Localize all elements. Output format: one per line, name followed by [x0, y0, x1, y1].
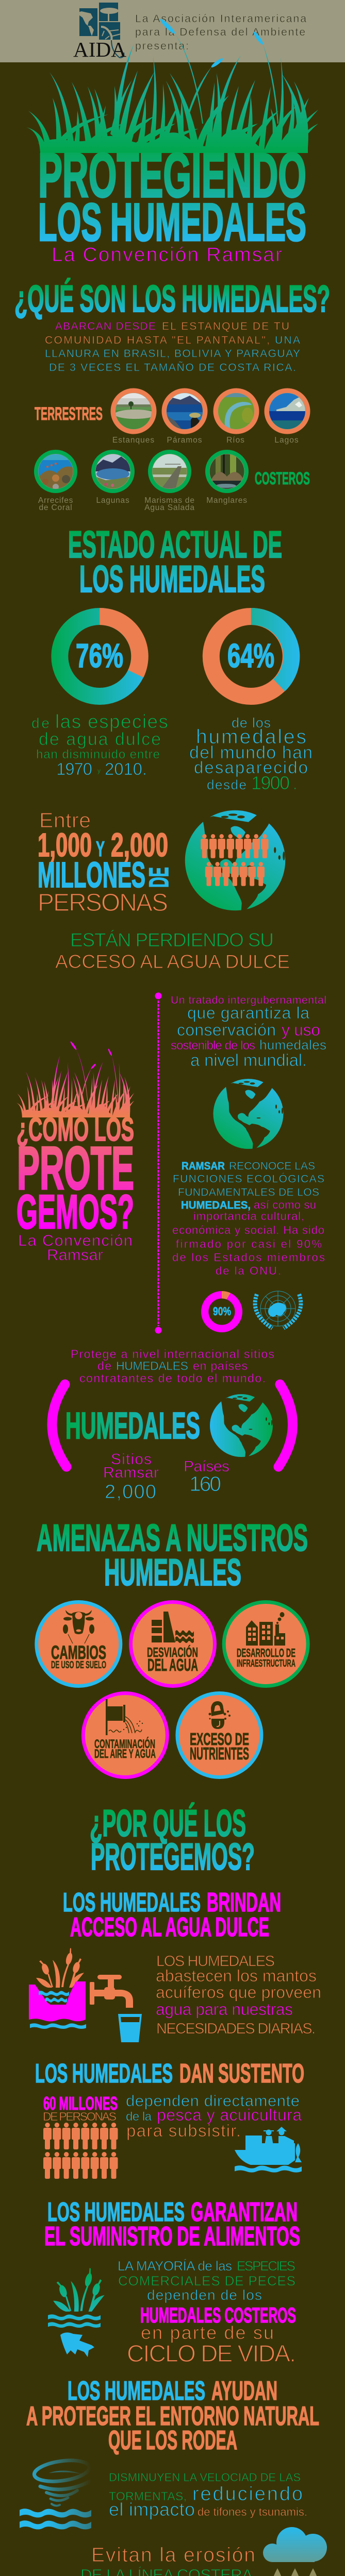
photo: arrecifes [34, 450, 77, 493]
ramsar text: FUNCIONES ECOLÓGICAS [173, 1173, 324, 1185]
presenter text: presenta: [135, 40, 189, 52]
heading: ayudan a proteger [26, 2376, 319, 2455]
text: humedales desaparecidos: humedales [196, 726, 306, 748]
text: tormentas [109, 2471, 307, 2520]
heading: brindan acceso: BRINDAN [207, 1888, 281, 1918]
text: tormentas: TORMENTAS, [109, 2489, 187, 2503]
icon: rows of people [43, 2123, 118, 2179]
heading: estado actual [68, 524, 282, 600]
text: humedales desaparecidos: del mundo han [189, 743, 313, 762]
statistic: 60 millones [43, 2093, 118, 2179]
ramsar text: importancia cultural, [193, 1210, 304, 1223]
text: protege sitios: en países [193, 1359, 248, 1372]
donut chart: 90% [205, 1291, 239, 1329]
captions: terrestres: Lagos [274, 436, 299, 445]
stat: sitios ramsar [103, 1451, 159, 1503]
text: especies de agua dulce: de agua dulce [39, 730, 161, 749]
text: especies de agua dulce [31, 711, 168, 778]
text: mantos acuíferos: abastecen los mantos [156, 1967, 317, 1985]
text: especies de agua dulce: de [31, 715, 50, 731]
ramsar text: de los Estados miembros [172, 1251, 325, 1264]
text: mantos acuíferos [156, 1953, 321, 2037]
definition text: DE 3 VECES EL TAMAÑO DE COSTA RICA. [49, 361, 296, 374]
text: humedales desaparecidos: . [293, 776, 297, 793]
threat: desarrollo de infraestructura: INFRAESTRUCTURA [237, 1658, 295, 1669]
AIDA logo [73, 3, 126, 61]
icon: pipe [106, 1699, 143, 1735]
icon: wetland to tap [29, 1948, 142, 2042]
photo: manglares [205, 450, 249, 493]
threat: contaminación: DEL AIRE Y AGUA [94, 1747, 156, 1761]
icon: buildings [246, 1612, 285, 1646]
threat: desviación del agua: DEL AGUA [147, 1655, 198, 1674]
photo: marismas [148, 450, 191, 493]
cattail heads [159, 18, 264, 69]
presenter text [135, 13, 306, 52]
heading: cómo los protegemos: GEMOS? [17, 1185, 134, 1239]
ramsar text: RECONOCE LAS [229, 1160, 315, 1172]
statistic: millones de personas [38, 808, 174, 917]
text: pesca y acuicultura: dependen directamente [126, 2092, 300, 2110]
heading: cómo los protegemos [17, 1111, 134, 1239]
icon: tornado over waves [20, 2458, 91, 2530]
presenter text: La Asociación Interamericana [135, 13, 306, 25]
text: especies comerciales: ESPECIES [237, 2258, 295, 2274]
ramsar text [172, 1160, 325, 1277]
threat: cambios de uso de suelo [37, 1602, 121, 1686]
header band [0, 0, 345, 62]
heading: garantizan alimentos: LOS HUMEDALES [47, 2197, 185, 2227]
treaty text: Un tratado intergubernamental [171, 994, 326, 1006]
ramsar text: así como su [254, 1198, 316, 1211]
threat: cambios de uso de suelo: CAMBIOS [51, 1642, 106, 1663]
globe with people [185, 810, 285, 912]
statistic: millones de personas: PERSONAS [38, 889, 168, 917]
icon: faucet [90, 1975, 133, 2008]
text: protege sitios: contratantes de todo el mundo. [79, 1371, 266, 1385]
ramsar text: FUNDAMENTALES DE LOS [178, 1187, 319, 1198]
donut chart: 64%: 64% [227, 637, 274, 674]
text: tormentas: reduciendo [192, 2483, 303, 2505]
treaty text: y uso [282, 1021, 320, 1039]
heading: por qué los protegemos [90, 1803, 255, 1878]
captions: terrestres: Estanques [112, 436, 155, 445]
text: humedales desaparecidos: 1900 [251, 772, 290, 793]
globe [213, 1079, 284, 1150]
captions: terrestres: Páramos [167, 436, 203, 445]
threat: desarrollo de infraestructura: DESARROLLO DE [237, 1646, 295, 1659]
text: humedales desaparecidos: desde [207, 777, 247, 792]
captions: costeros: Agua Salada [144, 503, 195, 512]
threat: exceso de nutrientes: NUTRIENTES [190, 1744, 249, 1763]
text: especies comerciales: en parte de su [141, 2322, 274, 2343]
statistic: millones de personas: MILLONES [38, 855, 145, 895]
icon: reeds, water and fish [48, 2268, 105, 2357]
text: mantos acuíferos: LOS HUMEDALES [156, 1953, 275, 1970]
photo: estanques [110, 388, 157, 434]
text: mantos acuíferos: NECESIDADES DIARIAS. [156, 2021, 316, 2037]
text: especies comerciales: CICLO DE VIDA. [127, 2340, 296, 2367]
stat: sitios ramsar: Ramsar [103, 1464, 159, 1481]
stat: sitios ramsar: Sitios [111, 1451, 152, 1468]
ramsar text: económica y social. Ha sido [172, 1224, 324, 1236]
heading: brindan acceso: LOS HUMEDALES [63, 1888, 201, 1918]
AIDA logo: AIDA [73, 38, 126, 61]
icon: glass [118, 2014, 142, 2042]
statistic: 60 millones: DE PERSONAS [43, 2110, 117, 2123]
icon: UN emblem [255, 1291, 301, 1328]
treaty text [171, 994, 326, 1070]
threat: contaminación [83, 1693, 167, 1777]
globe [210, 1394, 273, 1458]
text: tormentas: DISMINUYEN LA VELOCIAD DE LAS [109, 2471, 301, 2484]
text: especies comerciales: LA MAYORÍA de las [118, 2258, 232, 2274]
threat: cambios de uso de suelo: DE USO DE SUELO [51, 1659, 106, 1671]
bracket panel: humedales [52, 1384, 293, 1503]
photo: ríos [213, 388, 259, 434]
text: protege sitios: Protege a nivel internacional sitios [71, 1347, 274, 1361]
threat: exceso de nutrientes: EXCESO DE [190, 1730, 249, 1749]
definition text: LLANURA EN BRASIL, BOLIVIA Y PARAGUAY [45, 348, 300, 360]
heading: dan sustento: LOS HUMEDALES [35, 2059, 173, 2089]
captions: costeros: Marismas de [144, 496, 195, 505]
captions: costeros [38, 496, 248, 512]
text: pesca y acuicultura: para subsistir. [126, 2121, 241, 2140]
text: erosión [80, 2544, 257, 2576]
text: pesca y acuicultura [126, 2092, 302, 2140]
heading: ayudan a proteger: LOS HUMEDALES [68, 2376, 205, 2406]
treaty text: que garantiza la [187, 1004, 309, 1022]
donut chart: 76% [60, 608, 149, 697]
threat: desarrollo de infraestructura [224, 1602, 308, 1686]
text: pesca y acuicultura: pesca y acuicultura [157, 2106, 302, 2124]
dotted divider [155, 992, 162, 1333]
statistic: millones de personas: Y [96, 837, 105, 861]
captions: costeros: Arrecifes [38, 496, 73, 505]
stat: países: Países [184, 1458, 229, 1475]
captions: terrestres [112, 436, 299, 445]
text: humedales desaparecidos: de los [232, 715, 271, 731]
text: tormentas: el impacto [109, 2499, 195, 2520]
photo: lagos [264, 388, 310, 434]
subtitle: La Convención Ramsar [52, 244, 282, 266]
pink grass [17, 1041, 134, 1117]
donut chart: 76%: 76% [76, 637, 123, 674]
grass illustration [26, 18, 318, 153]
donut chart: 90%: 90% [213, 1304, 231, 1318]
icon: dam [152, 1612, 194, 1643]
text: especies de agua dulce: 1970 [56, 759, 92, 778]
icon: capsule [208, 1701, 231, 1729]
text: pesca y acuicultura: de la [126, 2110, 152, 2124]
captions: costeros: Lagunas [96, 496, 130, 505]
presenter text: para la Defensa del Ambiente [135, 26, 305, 38]
subtitle: la convención ramsar: Ramsar [47, 1246, 103, 1264]
heading: amenazas: HUMEDALES [104, 1552, 241, 1594]
wordmark: humedales: HUMEDALES [65, 1405, 200, 1447]
statistic: millones de personas: 2,000 [111, 826, 168, 863]
treaty text: a nivel mundial. [190, 1050, 307, 1070]
text: especies de agua dulce: han disminuido entre [36, 748, 160, 761]
heading: garantizan alimentos [44, 2197, 300, 2251]
text: protege sitios: HUMEDALES [116, 1359, 188, 1372]
text: mantos acuíferos: acuíferos que proveen [156, 1983, 321, 2002]
ramsar text: HUMEDALES, [181, 1199, 251, 1211]
icon: cow [63, 1610, 94, 1643]
subtitle: la convención ramsar [18, 1231, 133, 1264]
subtitle: la convención ramsar: La Convención [18, 1231, 133, 1249]
label: terrestres: TERRESTRES [35, 404, 103, 424]
photo: páramos [162, 388, 207, 434]
definition text: EL ESTANQUE DE TU [162, 320, 289, 332]
text: especies de agua dulce: y [97, 767, 101, 774]
ramsar text: RAMSAR [182, 1160, 225, 1172]
photo: lagunas [91, 450, 135, 493]
statistic: millones de personas: DE [144, 867, 174, 888]
definition text: ABARCAN DESDE [55, 320, 156, 332]
captions: terrestres: Ríos [226, 436, 245, 445]
stat: países: 160 [189, 1472, 221, 1496]
text: tormentas: de tifones y tsunamis. [198, 2505, 307, 2518]
text: acceso al agua dulce: ESTÁN PERDIENDO SU [70, 929, 274, 951]
ramsar text: de la ONU. [216, 1264, 281, 1277]
statistic: millones de personas: Entre [39, 808, 91, 832]
treaty text: conservación [177, 1021, 276, 1039]
threat: desviación del agua: DESVIACIÓN [147, 1645, 198, 1660]
text: erosión: Evitan la erosión [91, 2544, 255, 2566]
heading: cómo los protegemos: PROTE [17, 1134, 134, 1202]
icon: fishing boat [235, 2127, 302, 2173]
heading: amenazas [37, 1517, 308, 1594]
definition text: UNA [275, 334, 300, 346]
treaty text: humedales [259, 1037, 326, 1053]
heading: ayudan a proteger: QUE LOS RODEA [108, 2426, 237, 2455]
text: acceso al agua dulce: ACCESO AL AGUA DULCE [55, 951, 290, 972]
text: mantos acuíferos: agua para nuestras [156, 2000, 293, 2019]
statistic: 60 millones: 60 MILLONES [43, 2093, 118, 2114]
text: especies comerciales: COMERCIALES DE PECES [118, 2273, 295, 2289]
text: acceso al agua dulce [55, 929, 290, 972]
captions: costeros: Manglares [206, 496, 248, 505]
main title [38, 140, 306, 252]
text: especies comerciales [118, 2258, 296, 2367]
ramsar text: firmado por casi el 90% [176, 1238, 322, 1250]
donut chart: 64% [211, 608, 300, 697]
icon: cloud, rain and soil [263, 2527, 327, 2576]
stat: países [184, 1458, 229, 1496]
text: especies comerciales: dependen de los [147, 2287, 262, 2303]
captions: costeros: de Coral [39, 503, 72, 512]
heading: ayudan a proteger: AYUDAN [211, 2376, 277, 2406]
treaty text: sostenible de los [171, 1039, 255, 1053]
text: protege sitios: de [97, 1359, 111, 1372]
text: especies de agua dulce: las especies [55, 711, 168, 732]
text: humedales desaparecidos [189, 715, 313, 793]
statistic: millones de personas: 1,000 [38, 826, 92, 863]
text: protege sitios [71, 1347, 274, 1385]
stat: sitios ramsar: 2,000 [105, 1481, 156, 1503]
definition text: COMUNIDAD HASTA "EL PANTANAL", [45, 334, 270, 346]
heading: cómo los protegemos: ¿CÓMO LOS [17, 1111, 134, 1148]
text: especies de agua dulce: 2010. [105, 759, 147, 778]
threat: desviación del agua [131, 1602, 215, 1686]
heading: brindan acceso [63, 1888, 281, 1942]
threat: contaminación: CONTAMINACIÓN [94, 1737, 155, 1751]
definition text [45, 320, 300, 374]
threat: exceso de nutrientes [177, 1693, 261, 1777]
text: humedales desaparecidos: desaparecido [194, 758, 308, 777]
